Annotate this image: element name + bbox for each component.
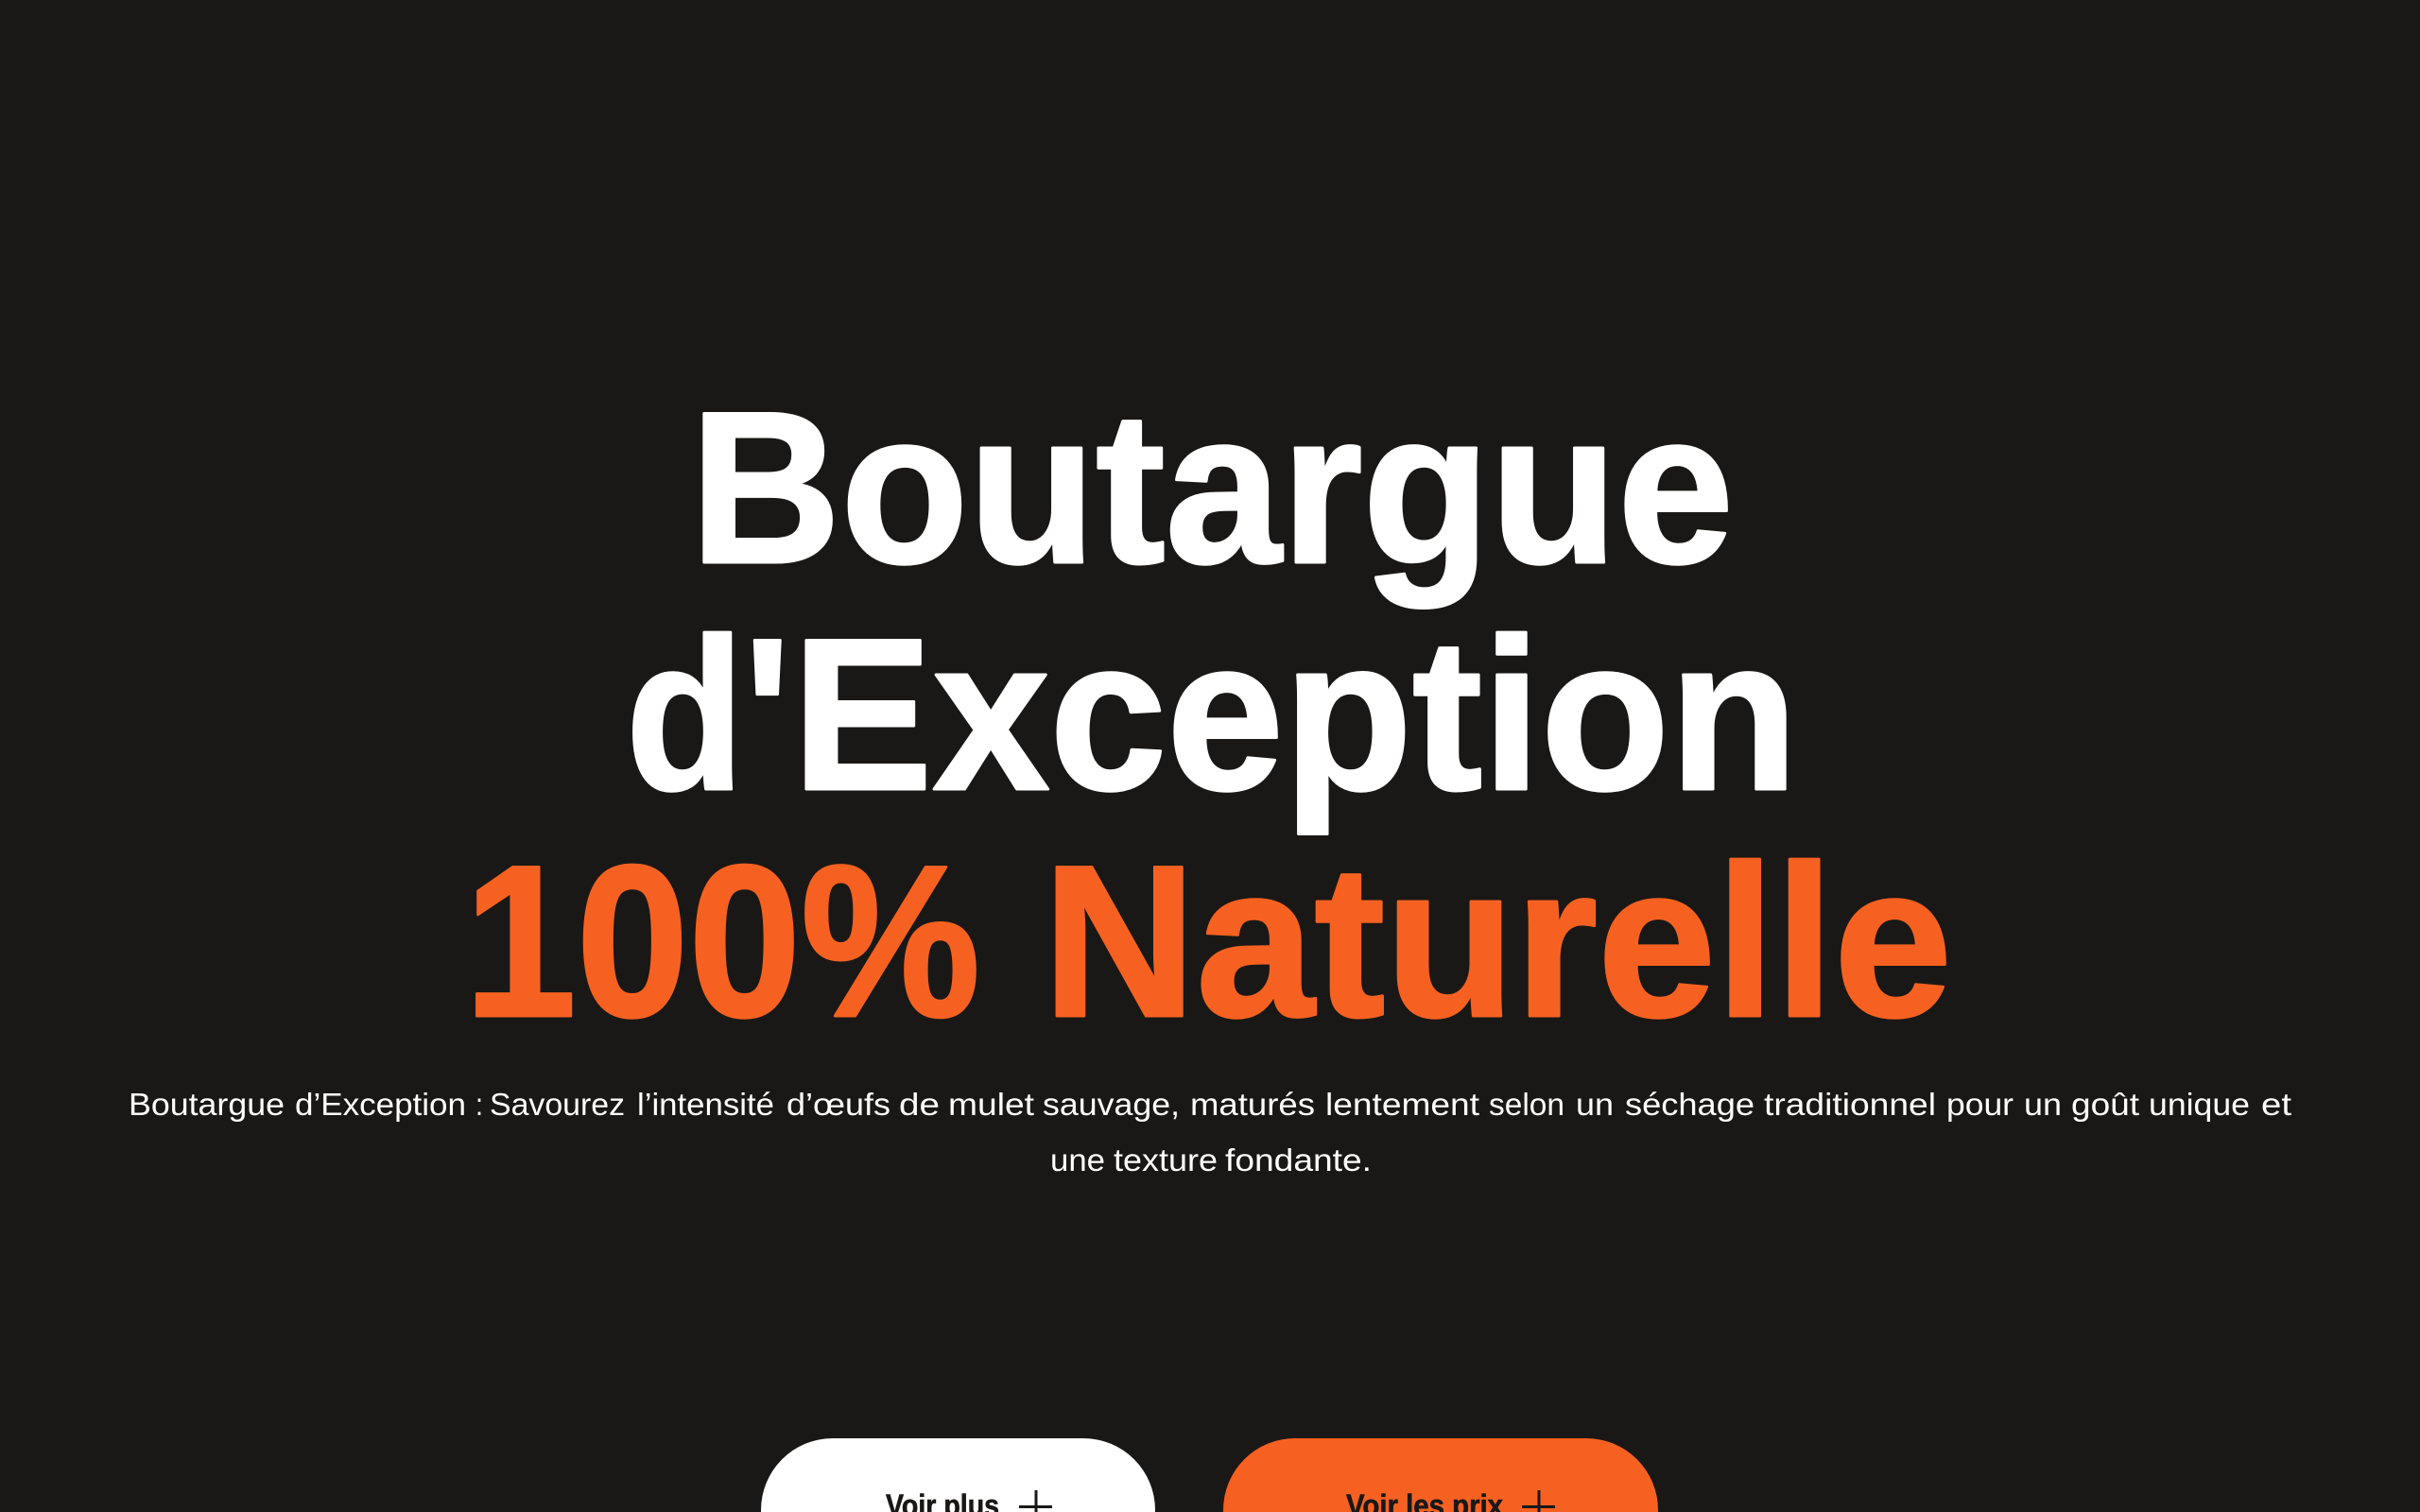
description line 2: texture: [1114, 1143, 1218, 1177]
description line 1: lentement: [1325, 1087, 1479, 1122]
description line 1: d’Exception: [295, 1087, 466, 1122]
description line 2: fondante.: [1225, 1143, 1372, 1177]
button: voir plus: [761, 1438, 1155, 1512]
button: voir les prix: [1223, 1438, 1658, 1512]
title line 2: Exception: [792, 593, 1798, 835]
description line 1: et: [2261, 1087, 2291, 1122]
description line 1: pour: [1946, 1087, 2014, 1122]
title line 1: Boutargue: [690, 367, 1734, 609]
description line 1: séchage: [1625, 1087, 1754, 1122]
description line 1: unique: [2149, 1087, 2250, 1122]
description text: [129, 1087, 2291, 1177]
description line 2: [1050, 1143, 1372, 1177]
description line 1: Boutargue: [129, 1087, 285, 1122]
icon: plus: [1522, 1490, 1555, 1512]
description line 2: une: [1050, 1143, 1105, 1177]
description line 1: :: [475, 1087, 483, 1122]
description line 1: traditionnel: [1764, 1087, 1936, 1122]
description line 1: un: [1576, 1087, 1614, 1122]
icon: plus: [1019, 1490, 1052, 1512]
description line 1: mulet: [948, 1087, 1034, 1122]
title line 3: accent: Naturelle: [1043, 820, 1952, 1062]
description line 1: maturés: [1190, 1087, 1315, 1122]
title line 2: d': [626, 593, 790, 835]
description line 1: un: [2024, 1087, 2062, 1122]
description line 1: selon: [1489, 1087, 1564, 1122]
description line 1: l’intensité: [637, 1087, 774, 1122]
description line 1: de: [899, 1087, 940, 1122]
description line 1: [129, 1087, 2291, 1122]
description line 1: Savourez: [490, 1087, 625, 1122]
description line 1: goût: [2071, 1087, 2139, 1122]
title line 3: accent: 100%: [464, 820, 980, 1062]
description line 1: sauvage,: [1043, 1087, 1180, 1122]
title line 3: accent: [464, 820, 1952, 1062]
description line 1: d’œufs: [786, 1087, 890, 1122]
title: [464, 367, 1952, 1062]
